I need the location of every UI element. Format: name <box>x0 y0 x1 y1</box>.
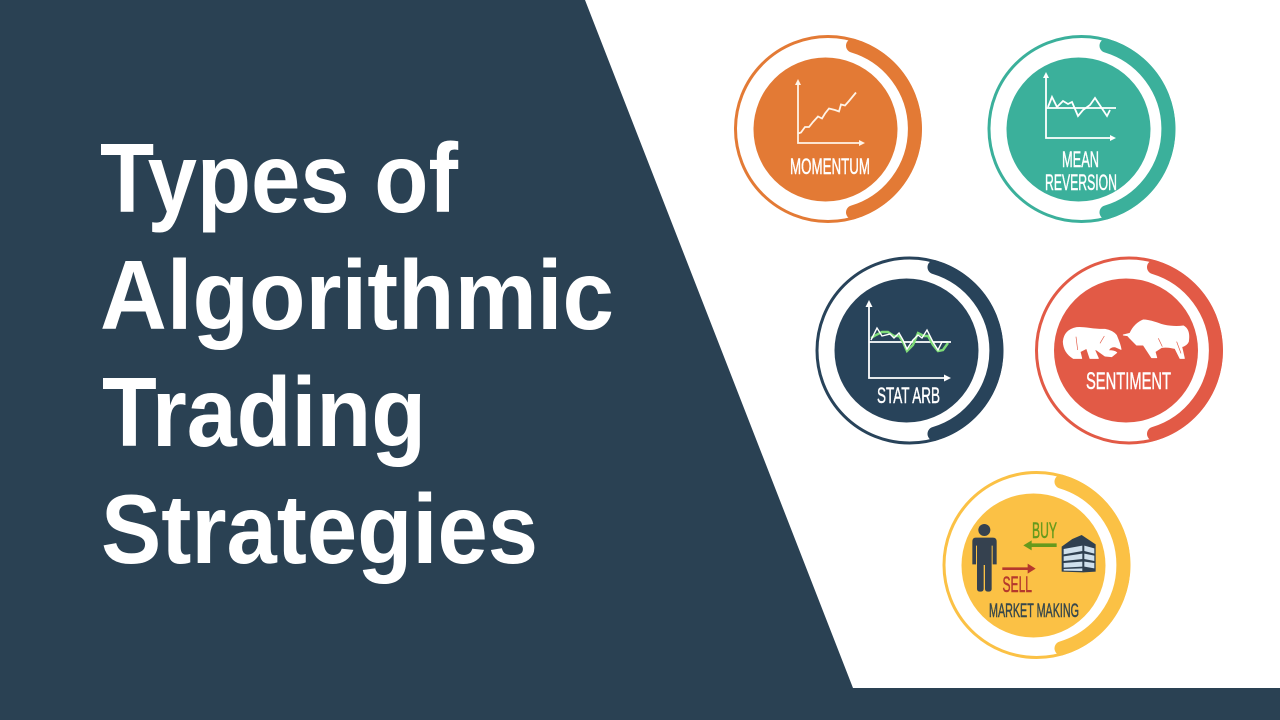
momentum disc <box>754 58 898 202</box>
title: Types of <box>100 123 458 233</box>
icon: bear and bull <box>1063 320 1189 358</box>
mean reversion chart <box>1043 72 1116 141</box>
stat arb chart <box>866 300 951 382</box>
icon: sell arrow <box>1002 564 1036 574</box>
sentiment disc <box>1054 278 1198 422</box>
momentum ring <box>736 36 920 222</box>
mean reversion label: REVERSION <box>1045 170 1117 195</box>
stat arb ring <box>817 258 1002 443</box>
title: Algorithmic <box>100 240 614 350</box>
title: Strategies <box>101 474 538 584</box>
stat arb label: STAT ARB <box>877 383 940 408</box>
market making illustration <box>972 524 1096 592</box>
badge: stat arb <box>817 258 1002 443</box>
title <box>100 123 614 584</box>
market making label: MARKET MAKING <box>989 600 1079 622</box>
icon: building <box>1062 535 1096 572</box>
mean reversion label: MEAN <box>1062 147 1099 172</box>
icon: person <box>972 524 997 592</box>
mean reversion disc <box>1006 58 1150 202</box>
stat arb disc <box>834 278 978 422</box>
sentiment ring <box>1036 258 1222 443</box>
mean reversion label <box>1045 147 1117 195</box>
market making ring <box>944 472 1129 658</box>
mean reversion ring <box>989 36 1174 222</box>
sell label: SELL <box>1002 572 1032 597</box>
badge: sentiment <box>1036 258 1222 443</box>
title: Trading <box>102 357 426 467</box>
badge: mean reversion <box>989 36 1174 222</box>
momentum label: MOMENTUM <box>790 154 870 179</box>
badge: market making <box>944 472 1129 658</box>
sentiment label: SENTIMENT <box>1086 368 1171 395</box>
market making disc <box>962 494 1106 638</box>
badge: momentum <box>736 36 920 222</box>
buy label: BUY <box>1032 518 1057 543</box>
icon: buy arrow <box>1023 540 1057 550</box>
momentum chart <box>795 79 865 146</box>
